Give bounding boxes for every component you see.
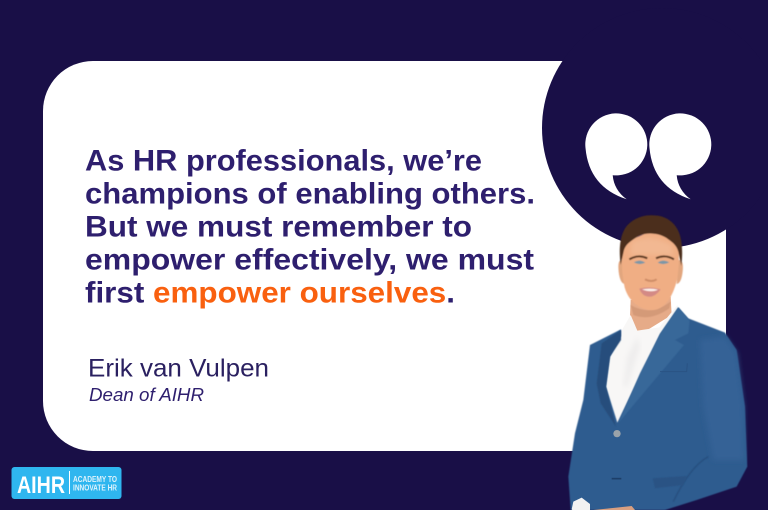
logo: AIHR: AIHR — [17, 472, 65, 499]
right lapel — [619, 307, 690, 423]
attribution role: Dean of AIHR — [89, 385, 204, 405]
quote text: first empower ourselves . — [85, 276, 455, 310]
head — [618, 215, 683, 310]
nose — [645, 279, 657, 281]
quote text: champions of enabling others. — [85, 178, 535, 210]
quote text — [85, 144, 535, 310]
neck — [629, 297, 672, 337]
ears — [618, 260, 683, 284]
hair — [620, 215, 682, 266]
sleeve tone — [700, 337, 744, 460]
face — [622, 230, 679, 310]
quote text: But we must remember to — [85, 210, 472, 244]
pocket flap — [653, 476, 687, 488]
chest pocket — [660, 363, 687, 372]
forehead highlight — [630, 238, 673, 255]
left lapel — [597, 330, 621, 427]
eyes — [634, 261, 669, 264]
panel: speech bubble — [43, 61, 726, 451]
portrait: man in blue suit — [568, 215, 747, 510]
logo: AIHR: INNOVATE HR — [73, 484, 117, 492]
jacket — [568, 307, 747, 510]
mouth — [639, 287, 661, 297]
quote text: As HR professionals, we’re — [85, 144, 482, 178]
quote text: empower effectively, we must — [85, 244, 534, 276]
icon: quotation marks — [585, 113, 711, 199]
attribution name: Erik van Vulpen — [88, 354, 269, 382]
sleeve crease — [673, 457, 708, 502]
button — [613, 430, 621, 437]
buttonhole — [612, 476, 621, 481]
eyebrows — [629, 256, 674, 259]
logo: AIHR: ACADEMY TO — [73, 475, 117, 484]
shirt — [606, 305, 680, 424]
panel: dark circle cut-out — [542, 8, 768, 248]
cuff and hand — [572, 498, 590, 510]
logo: AIHR — [12, 467, 122, 499]
